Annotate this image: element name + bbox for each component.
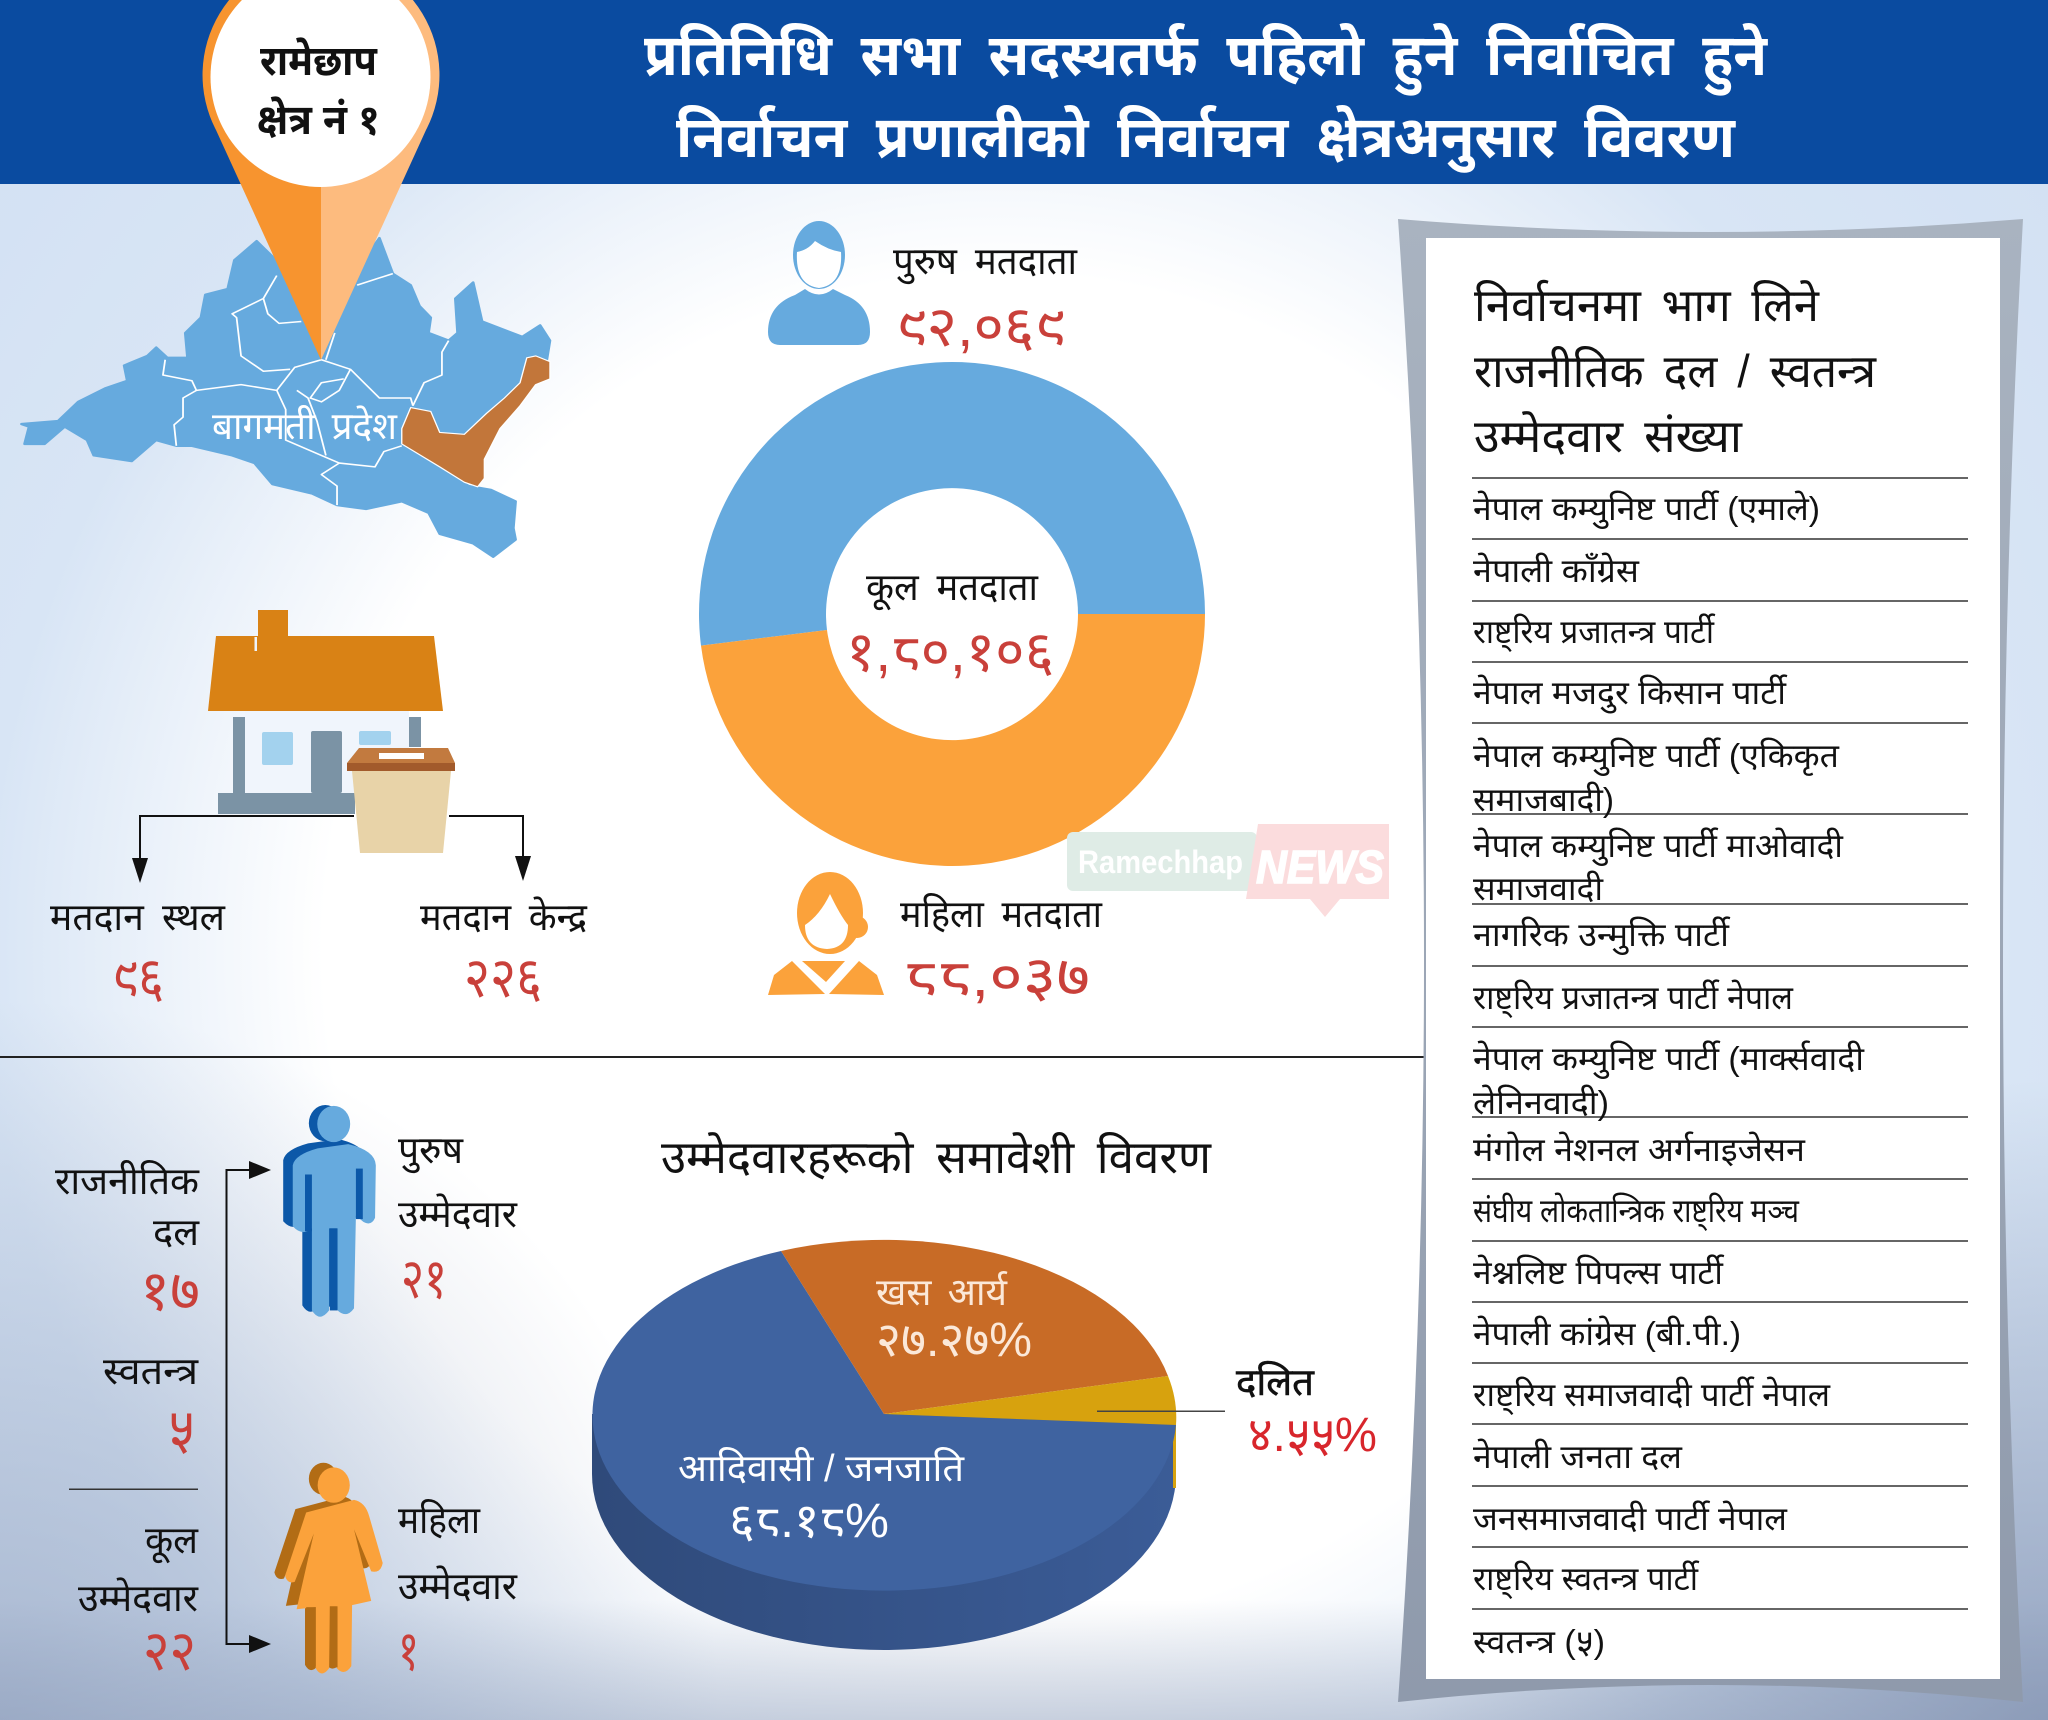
watermark: Ramechhap News: NEWS	[1256, 841, 1384, 893]
list of parties: नेपाल कम्युनिष्ट पार्टी (मार्क्सवादी	[1473, 1039, 1865, 1079]
list of parties	[1473, 489, 1865, 1660]
arrow: to polling centre	[449, 816, 531, 881]
pie slice: Dalit	[884, 1376, 1176, 1425]
title: निर्वाचन प्रणालीको निर्वाचन क्षेत्रअनुसार विवरण	[676, 105, 1736, 173]
pie label: Khas Arya: २७.२७%	[876, 1314, 1032, 1367]
map label: बागमती प्रदेश	[212, 404, 398, 448]
white sheet	[1426, 238, 2000, 1679]
icon: male voter	[768, 221, 870, 345]
stat: female candidates: उम्मेदवार	[398, 1564, 518, 1608]
list of parties: समाजबादी)	[1473, 781, 1614, 818]
stat: political parties: १७	[140, 1259, 200, 1322]
stat: female candidates: महिला	[398, 1498, 481, 1542]
watermark: Ramechhap News	[1067, 824, 1389, 917]
map: Ramechhap district	[402, 356, 550, 487]
donut centre: total voters: कूल मतदाता	[866, 567, 1039, 611]
list of parties: नेपाली कांग्रेस (बी.पी.)	[1473, 1314, 1741, 1352]
stat: female voters: ८८,०३७	[904, 945, 1090, 1008]
pie side	[592, 1414, 1176, 1650]
icon: ballot box	[347, 748, 455, 853]
icon: polling house	[208, 610, 443, 814]
stat: total candidates: २२	[143, 1619, 196, 1682]
donut segment: male	[699, 362, 1205, 646]
donut centre: total voters: १,८०,१०६	[846, 620, 1054, 683]
heading: candidate inclusion: उम्मेदवारहरूको समावेशी विवरण	[661, 1130, 1212, 1183]
stat: independents: ५	[168, 1397, 195, 1460]
list of parties: राष्ट्रिय स्वतन्त्र पार्टी	[1473, 1560, 1699, 1599]
list of parties: नेपाल कम्युनिष्ट पार्टी (एकिकृत	[1473, 736, 1840, 776]
donut chart: voters	[699, 362, 1205, 866]
pie label: indigenous	[678, 1446, 965, 1548]
location pin	[203, 0, 439, 360]
stat: polling places: ९६	[112, 946, 164, 1009]
stat: male voters: ९२,०६९	[896, 295, 1065, 358]
title	[644, 23, 1768, 173]
pie label: Dalit with leader line: दलित	[1236, 1360, 1315, 1404]
pie slice: Khas Arya	[781, 1240, 1168, 1414]
arrow: bracket to male and female candidates	[226, 1161, 271, 1653]
list of parties: नेपाली काँग्रेस	[1473, 551, 1640, 589]
list of parties: संघीय लोकतान्त्रिक राष्ट्रिय मञ्च	[1473, 1192, 1800, 1231]
stat: polling places	[50, 897, 226, 1009]
list of parties: नेपाल कम्युनिष्ट पार्टी (एमाले)	[1473, 489, 1820, 529]
stat: total candidates: उम्मेदवार	[78, 1576, 199, 1620]
header band	[0, 0, 2048, 184]
stat: polling centres: २२६	[464, 946, 542, 1009]
map: Bagmati province	[21, 238, 550, 557]
list of parties: राष्ट्रिय समाजवादी पार्टी नेपाल	[1473, 1375, 1831, 1415]
pie label: Dalit with leader line: ४.५५%	[1248, 1409, 1377, 1462]
stat: total candidates: कूल	[145, 1520, 199, 1564]
pie slice: indigenous	[592, 1251, 1176, 1591]
panel: parties list	[1398, 219, 2023, 1702]
pie label: Dalit with leader line	[1097, 1360, 1377, 1462]
list of parties: नेपाल मजदुर किसान पार्टी	[1473, 673, 1787, 714]
pie label: indigenous: आदिवासी / जनजाति	[678, 1446, 965, 1490]
sum rule	[69, 1488, 198, 1490]
stat: male voters: पुरुष मतदाता	[893, 241, 1078, 284]
panel heading	[1474, 278, 1878, 462]
icon: female candidate	[274, 1463, 383, 1673]
list of parties: समाजवादी	[1473, 870, 1604, 907]
icon: male candidate	[283, 1105, 376, 1317]
donut centre: total voters	[846, 567, 1054, 683]
pie label: indigenous: ६८.१८%	[729, 1495, 889, 1548]
stat: female voters: महिला मतदाता	[900, 892, 1103, 936]
stat: male candidates: उम्मेदवार	[398, 1192, 518, 1236]
stat: polling places: मतदान स्थल	[50, 897, 226, 939]
3D pie chart	[592, 1240, 1176, 1650]
stat: independents: स्वतन्त्र	[103, 1351, 199, 1393]
list of parties: नेश्नलिष्ट पिपल्स पार्टी	[1473, 1253, 1724, 1291]
stat: female candidates	[398, 1498, 518, 1682]
stat: male voters	[893, 241, 1078, 358]
panel heading: उम्मेदवार संख्या	[1474, 409, 1743, 462]
panel heading: निर्वाचनमा भाग लिने	[1474, 278, 1820, 331]
list of parties: स्वतन्त्र (५)	[1473, 1623, 1605, 1660]
list of parties: मंगोल नेशनल अर्गनाइजेसन	[1473, 1130, 1806, 1168]
list of parties: लेनिनवादी)	[1473, 1083, 1609, 1121]
stat: polling centres	[420, 895, 588, 1009]
title: प्रतिनिधि सभा सदस्यतर्फ पहिलो हुने निर्वाचित हुने	[644, 23, 1768, 96]
pin label	[257, 37, 380, 143]
paper frame	[1398, 219, 2023, 1702]
arrow: to polling place	[132, 816, 354, 883]
stat: political parties: राजनीतिक	[55, 1159, 200, 1203]
list of parties: नेपाल कम्युनिष्ट पार्टी माओवादी	[1473, 826, 1844, 866]
stat: female voters	[900, 892, 1103, 1008]
watermark: Ramechhap News: Ramechhap	[1078, 844, 1243, 880]
stat: male candidates	[398, 1130, 518, 1310]
list rules	[1472, 478, 1968, 1609]
stat: male candidates: पुरुष	[398, 1130, 464, 1173]
list of parties: राष्ट्रिय प्रजातन्त्र पार्टी	[1473, 613, 1715, 652]
stat: polling centres: मतदान केन्द्र	[420, 895, 588, 939]
pin label: क्षेत्र नं १	[257, 96, 380, 143]
icon: female voter	[768, 872, 884, 995]
panel heading: राजनीतिक दल / स्वतन्त्र	[1474, 345, 1878, 397]
stat: political parties	[55, 1159, 200, 1322]
list of parties: जनसमाजवादी पार्टी नेपाल	[1473, 1499, 1788, 1537]
stat: female candidates: १	[398, 1619, 419, 1682]
pie label: Khas Arya	[876, 1270, 1032, 1367]
stat: independents	[103, 1351, 199, 1460]
section divider	[0, 1056, 1425, 1058]
donut segment: female	[701, 614, 1205, 866]
stat: total candidates	[78, 1520, 199, 1682]
list of parties: राष्ट्रिय प्रजातन्त्र पार्टी नेपाल	[1473, 978, 1794, 1018]
map: province outline	[21, 238, 550, 557]
stat: political parties: दल	[153, 1212, 200, 1254]
pie label: Khas Arya: खस आर्य	[876, 1270, 1008, 1314]
stat: male candidates: २१	[401, 1247, 447, 1310]
map: district borders	[163, 274, 449, 505]
pin label: रामेछाप	[260, 37, 378, 84]
list of parties: नेपाली जनता दल	[1473, 1437, 1683, 1475]
list of parties: नागरिक उन्मुक्ति पार्टी	[1473, 916, 1730, 955]
